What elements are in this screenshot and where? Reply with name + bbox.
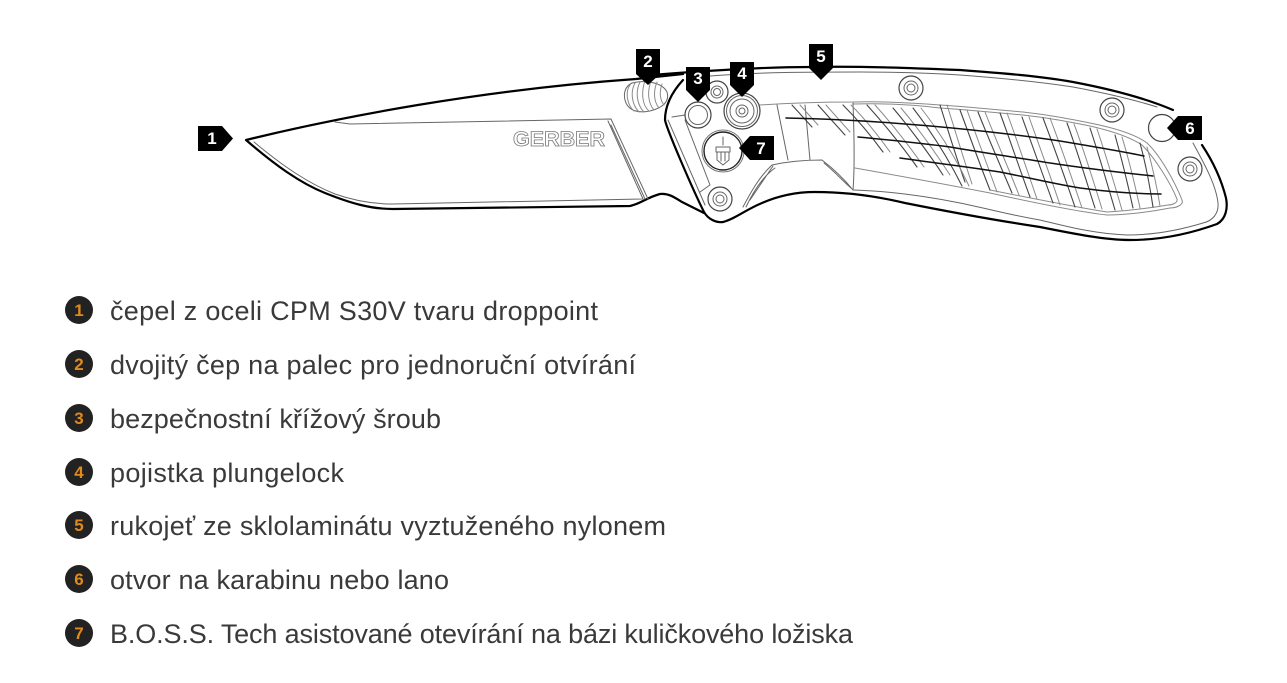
callout 5: 5 [816, 47, 826, 66]
plunge lock [724, 93, 760, 129]
grip diagonal cuts [792, 105, 1160, 210]
callout 7 [739, 136, 774, 160]
list item 5: rukojeť ze sklolaminátu vyztuženého nylonem [110, 511, 666, 541]
screw: handle top [899, 76, 923, 100]
blade logo: GERBER: GERBER [513, 128, 605, 151]
feature list [65, 296, 854, 649]
lanyard hole [1148, 114, 1176, 142]
handle grip window [743, 102, 1182, 215]
list item 3: bezpečnostní křížový šroub [110, 404, 441, 434]
screws and pivots [685, 76, 1202, 211]
callout 5 [809, 44, 833, 80]
screw: top bolster [706, 81, 728, 103]
list item 6: otvor na karabinu nebo lano [110, 565, 449, 595]
callout 6: 6 [1185, 119, 1195, 138]
list item 4: pojistka plungelock [110, 458, 344, 488]
list item 1: 1 [74, 301, 84, 320]
callout 6 [1167, 116, 1202, 140]
callout 3: 3 [693, 69, 703, 88]
callout 4 [730, 62, 754, 97]
callout 1 [198, 126, 233, 151]
list item 3: 3 [74, 409, 84, 428]
screw: handle right [1100, 98, 1124, 122]
callout 7: 7 [756, 139, 766, 158]
callout 1: 1 [207, 129, 217, 148]
list item 2: 2 [74, 355, 84, 374]
callout 2: 2 [643, 52, 653, 71]
callout 2 [636, 49, 660, 85]
list item 4: 4 [74, 463, 84, 482]
screw: bottom bolster [708, 187, 732, 211]
list item 2: dvojitý čep na palec pro jednoruční otvírání [110, 350, 636, 380]
screw: handle butt [1178, 157, 1202, 181]
hole: security screw [685, 102, 711, 128]
list item 7: 7 [74, 624, 84, 643]
list item 5: 5 [74, 516, 84, 535]
boss tech pivot with logo [702, 130, 744, 172]
list item 6: 6 [74, 570, 84, 589]
handle outline [640, 67, 1227, 240]
list item 7: B.O.S.S. Tech asistované otevírání na bázi kuličkového ložiska [110, 619, 854, 649]
thumb stud [624, 81, 668, 112]
grip horizontal cuts [786, 118, 1161, 194]
blade [246, 74, 704, 213]
knife illustration [246, 67, 1227, 240]
callout 4: 4 [737, 64, 747, 83]
list item 1: čepel z oceli CPM S30V tvaru droppoint [110, 296, 598, 326]
callout 3 [686, 67, 710, 102]
